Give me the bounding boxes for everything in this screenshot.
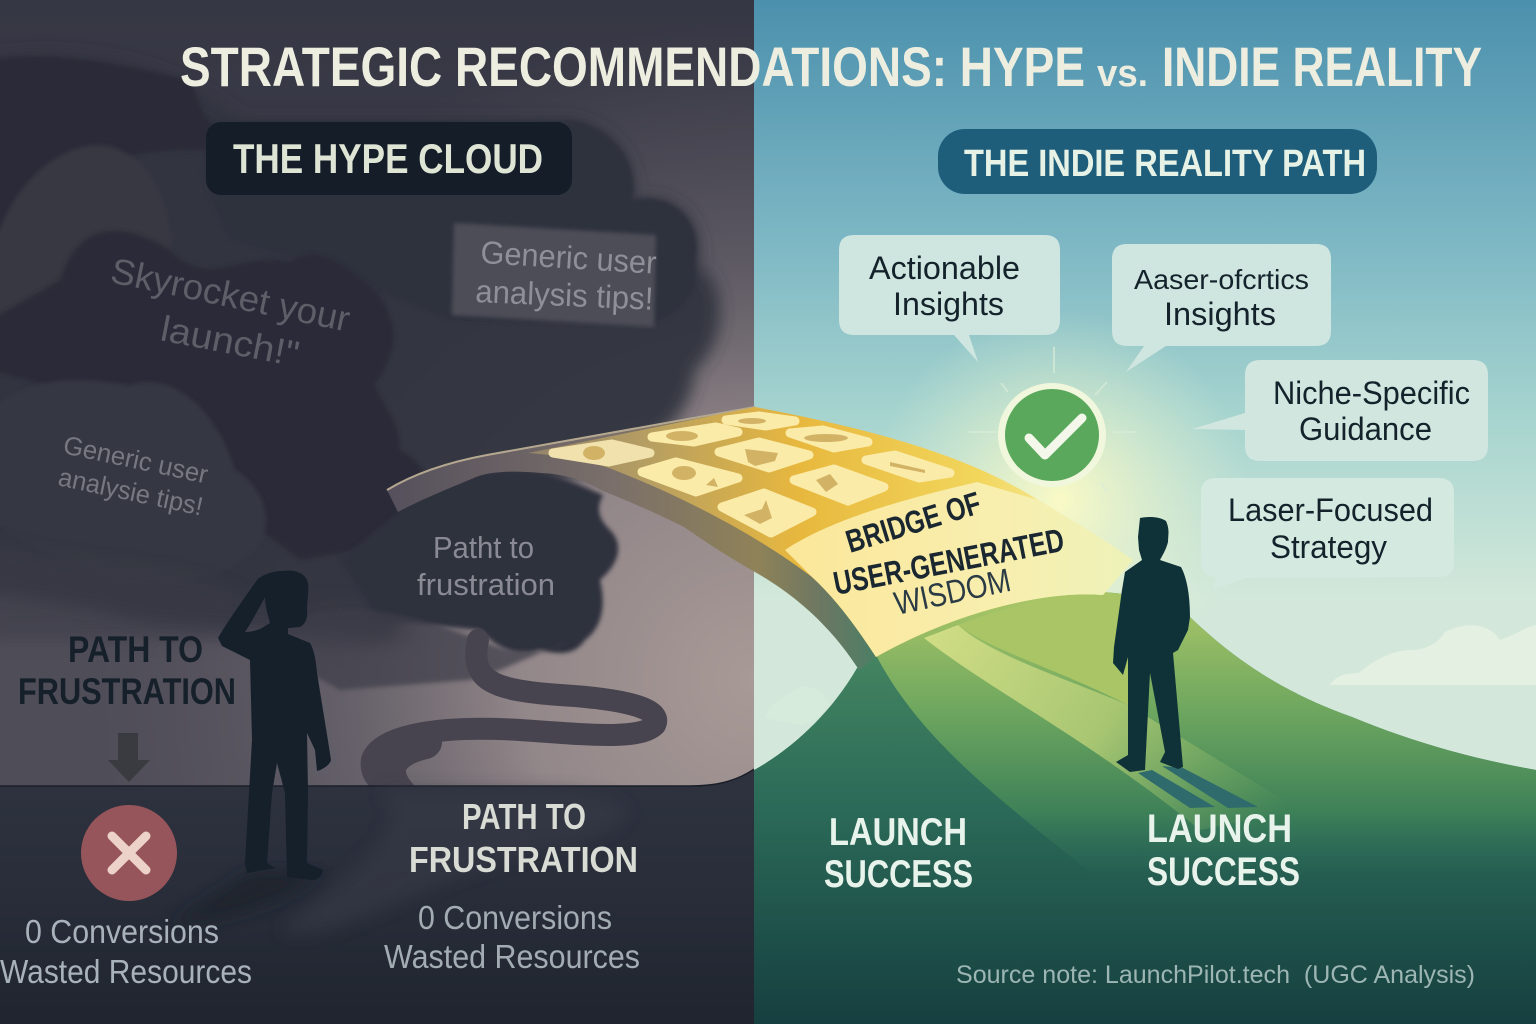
heading: path to frustration dark [20,636,234,704]
callout: laser-focused strategy: Laser-Focused [1228,492,1433,528]
bridge text: BRIDGE OF [842,485,985,560]
tile glyphs [583,418,925,524]
deck tiles [553,416,950,533]
heading: launch success right [1148,814,1299,886]
callout: aaser-ofcrtics insights [1112,244,1331,372]
figure: standing person silhouette [1113,517,1190,772]
heading: path to frustration light [411,804,636,872]
person shadow [200,873,304,914]
icon: green check badge [969,347,1136,492]
source note: Source note: LaunchPilot.tech (UGC Analysis) [956,961,1475,989]
cloud under bridge [292,476,622,691]
bridge text [830,485,1067,622]
label: the indie reality path: THE INDIE REALITY PATH [964,143,1366,185]
arrow: down [108,733,150,782]
cloud text: generic tips lower: analysie tips! [56,462,206,521]
cloud text: generic tips top: Generic user [480,234,658,281]
bridge top edge highlight [387,407,755,490]
cloud right [1330,625,1536,685]
text: conversions center: 0 Conversions [418,899,612,936]
hill bright patch [958,614,1128,705]
ground [0,765,760,1024]
cloud left [765,686,830,725]
heading: launch success right: LAUNCH [1147,807,1292,851]
figure: frustrated person silhouette [218,571,331,880]
callout: aaser-ofcrtics insights: Insights [1164,296,1276,332]
bridge underside band [387,407,900,670]
bridge deck [528,407,1133,657]
text: conversions left: Wasted Resources [0,953,252,990]
cloud text: path to frustration [417,536,553,596]
sun glow [908,329,1217,594]
cloud text: skyrocket: Skyrocket your [107,250,354,340]
winding path to frustration [372,640,656,800]
callout: actionable insights: Actionable [869,250,1020,286]
heading: launch success right: SUCCESS [1147,850,1300,894]
text: conversions left [0,919,251,984]
bridge text panel [785,482,1133,657]
callout: laser-focused strategy: Strategy [1270,529,1387,565]
heading: path to frustration dark: PATH TO [68,629,203,670]
panel: hype cloud side [0,0,760,1024]
cloud text: generic tips top [476,241,656,315]
text: conversions center: Wasted Resources [384,938,640,975]
hill light wedge [877,592,1536,850]
hill light strip [924,625,1259,830]
bridge text: WISDOM [891,561,1014,622]
title: STRATEGIC RECOMMENDATIONS: HYPE [180,35,1085,98]
text: conversions left: 0 Conversions [25,913,219,950]
callout: niche-specific guidance: Niche-Specific [1273,375,1470,411]
hill [754,592,1536,1024]
callout: actionable insights [839,235,1060,362]
storm cloud [0,54,720,649]
callout: niche-specific guidance [1192,360,1488,461]
label: the indie reality path [938,129,1377,194]
heading: path to frustration light: PATH TO [462,796,586,837]
ground path highlight [302,782,586,926]
cloud text: generic tips lower [58,437,208,516]
cloud text: path to frustration: frustration [417,567,555,602]
icon: red cross [81,805,177,901]
label: the hype cloud: THE HYPE CLOUD [233,135,543,182]
panel: indie reality side [754,0,1536,1024]
text: conversions center [384,905,639,968]
cloud text: generic tips lower: Generic user [61,430,211,490]
heading: launch success left: SUCCESS [824,853,973,896]
label: the hype cloud [206,122,572,195]
heading: launch success left [824,818,972,888]
cloud text: skyrocket: launch!" [157,308,303,375]
heading: path to frustration dark: FRUSTRATION [18,671,236,712]
bridge of user-generated wisdom [387,407,1133,670]
heading: path to frustration light: FRUSTRATION [409,839,638,880]
callout: aaser-ofcrtics insights: Aaser-ofcrtics [1134,264,1309,295]
left background [0,0,754,800]
callout: actionable insights: Insights [893,286,1004,322]
right sky [754,0,1536,800]
cloud text: skyrocket [112,260,350,364]
callout: niche-specific guidance: Guidance [1299,411,1432,447]
bridge text: USER-GENERATED [830,521,1067,602]
cloud text: path to frustration: Patht to [433,530,534,565]
heading: launch success left: LAUNCH [829,811,967,854]
cloud text: generic tips top: analysis tips! [475,273,654,317]
right person shadow [1138,766,1258,808]
callout: laser-focused strategy [1201,478,1454,590]
title: vs. [1097,53,1148,95]
